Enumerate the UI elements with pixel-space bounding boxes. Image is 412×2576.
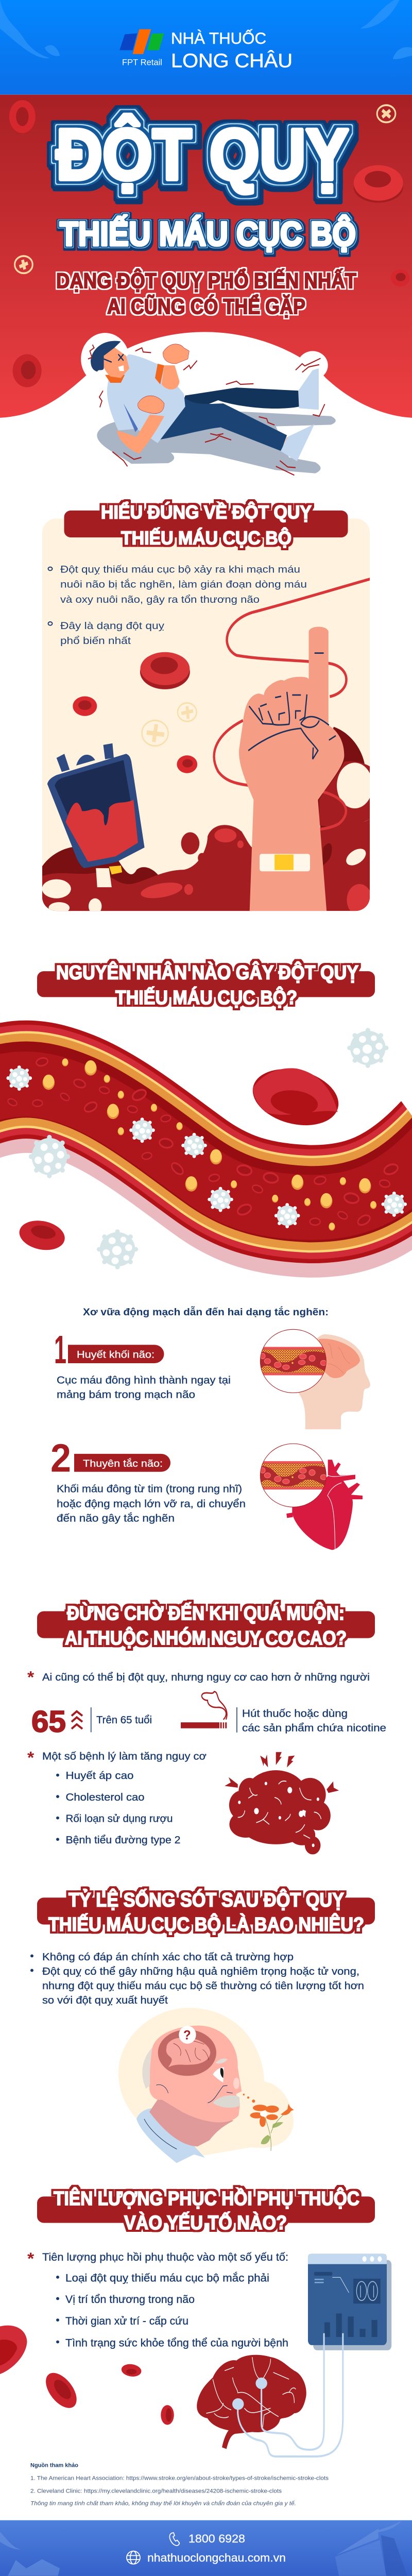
icon: red blood cells (9, 100, 409, 387)
risk list: medical conditions: Rối loạn sử dụng rượu (66, 1813, 173, 1824)
stat: over 65 years: Trên 65 tuổi (96, 1714, 152, 1726)
item 2: cerebral embolism: Thuyên tắc não: (83, 1458, 163, 1469)
intro text: two blockage types: Xơ vữa động mạch dẫn đến hai dạng tắc nghẽn: (83, 1306, 329, 1318)
illustration: red brain with lightning (225, 1752, 339, 1854)
panel: understanding ischemic stroke (42, 518, 372, 916)
heading banner: high risk group (37, 1601, 375, 1649)
list: prognosis factors: Thời gian xử trí - cấp cứu (65, 2314, 188, 2327)
heading banner: high risk group: AI THUỘC NHÓM NGUY CƠ CAO? (65, 1626, 347, 1649)
item 2: cerebral embolism: Khối máu đông từ tim (trong rung nhĩ) (57, 1483, 242, 1495)
icon and text: smoking: Hút thuốc hoặc dùng (242, 1708, 348, 1719)
heading banner: high risk group: ĐỪNG CHỜ ĐẾN KHI QUÁ MUỘN: (67, 1601, 345, 1624)
hero panel: red gradient background with white hump (0, 95, 412, 418)
illustration: man collapsing from stroke (81, 333, 336, 475)
heading banner: causes: THIẾU MÁU CỤC BỘ? (115, 986, 297, 1009)
heading banner: understanding: HIỂU ĐÚNG VỀ ĐỘT QUỴ (101, 501, 312, 522)
heading banner: prognosis: TIÊN LƯỢNG PHỤC HỒI PHỤ THUỘC (54, 2187, 359, 2210)
flower (243, 2094, 294, 2151)
logo: FPT Retail: FPT Retail (122, 58, 162, 67)
bullets: definition text: và oxy nuôi não, gây ra tổn thương não (60, 594, 260, 605)
references: Nguồn tham khảo (30, 2462, 78, 2468)
illustration: artery with plaque and cells (0, 1028, 412, 1269)
tagline: AI CŨNG CÓ THỂ GẶP (107, 294, 305, 318)
header: blue brand bar (0, 0, 412, 95)
footer: contact bar (0, 2520, 412, 2576)
item 1: cerebral thrombosis: 1 (54, 1327, 66, 1372)
references (30, 2462, 329, 2507)
brand name: Nhà thuốc Long Châu (171, 28, 293, 72)
references: 1. The American Heart Association: https://www.stroke.org/en/about-stroke/types-of-stroke/ischemic-stroke-clots (30, 2476, 329, 2481)
risk intro line: * (27, 1668, 34, 1687)
bullets: survival text (30, 1951, 364, 2006)
item 2: cerebral embolism: hoặc động mạch lớn vỡ ra, di chuyển (57, 1498, 246, 1510)
decoration: storefront (0, 2520, 407, 2576)
brain (197, 2355, 306, 2449)
wires (238, 2333, 343, 2456)
heading banner: understanding: THIẾU MÁU CỤC BỘ (121, 527, 291, 549)
illustration: elderly man smelling flower (118, 2008, 294, 2163)
risk list: medical conditions: Cholesterol cao (66, 1791, 145, 1803)
subtitle: Thiếu máu cục bộ: THIẾU MÁU CỤC BỘ (60, 215, 356, 253)
logo: FPT Retail (119, 29, 164, 67)
heading banner: causes (37, 961, 375, 1009)
bandage (260, 854, 310, 871)
heading banner: understanding (64, 501, 348, 549)
title: Đột quỵ: ĐỘT QUỴ (56, 114, 349, 195)
monitor (308, 2254, 391, 2350)
stat: over 65 years: 65 (31, 1705, 66, 1738)
brand name: Nhà thuốc Long Châu: NHÀ THUỐC (171, 28, 266, 47)
list: prognosis factors: * (27, 2249, 34, 2268)
hand (239, 626, 344, 911)
heading banner: prognosis (37, 2187, 375, 2234)
risk intro line (27, 1668, 370, 1687)
squiggles: shaking marks (88, 345, 325, 475)
white blood cells in vessel (6, 1065, 407, 1228)
risk list: medical conditions: * (27, 1749, 34, 1767)
stat: over 65 years (31, 1705, 152, 1738)
item 2: cerebral embolism: đến não gây tắc nghẽn (57, 1513, 175, 1524)
bullets: survival text: so với đột quỵ xuất huyết (42, 1995, 168, 2006)
risk list: medical conditions: Huyết áp cao (66, 1770, 134, 1782)
list: prognosis factors (27, 2249, 288, 2349)
risk list: medical conditions: Một số bệnh lý làm tăng nguy cơ (42, 1751, 207, 1762)
plus badges (142, 703, 197, 746)
risk list: medical conditions: Bệnh tiểu đường type 2 (66, 1834, 180, 1846)
item 1: cerebral thrombosis: mảng bám trong mạch não (57, 1389, 195, 1401)
item 1: cerebral thrombosis: Cục máu đông hình thành ngay tại (57, 1375, 231, 1386)
item 1: cerebral thrombosis: Huyết khối não: (77, 1349, 154, 1360)
bullets: definition text: phổ biến nhất (60, 635, 131, 647)
list: prognosis factors: Loại đột quỵ thiếu máu cục bộ mắc phải (65, 2272, 269, 2284)
item 2: cerebral embolism (50, 1436, 246, 1524)
illustration: head, brain and blocked vessel (259, 1329, 370, 1429)
references: 2. Cleveland Clinic: https://my.clevelandclinic.org/health/diseases/24208-ischemic-stroke-clots (30, 2488, 282, 2495)
illustration: elderly man smelling flower: ? (183, 2028, 191, 2043)
bullets: definition text: nuôi não bị tắc nghẽn, làm gián đoạn dòng máu (60, 579, 307, 590)
bullets: survival text: Đột quỵ có thể gây những hậu quả nghiêm trọng hoặc tử vong, (42, 1965, 359, 1977)
risk list: medical conditions (27, 1749, 207, 1846)
floating cells outside vessel (18, 1028, 388, 1269)
bullets: definition text: Đột quỵ thiếu máu cục bộ xảy ra khi mạch máu (60, 564, 300, 575)
illustration: blood bag, hand and tube (42, 579, 372, 916)
heading banner: prognosis: VÀO YẾU TỐ NÀO? (124, 2211, 287, 2234)
item 1: cerebral thrombosis (54, 1327, 231, 1401)
heading banner: survival rate: THIẾU MÁU CỤC BỘ LÀ BAO NHIÊU? (48, 1913, 364, 1936)
icon and text: smoking (181, 1691, 386, 1734)
red blood cells (73, 652, 197, 773)
tube (214, 579, 370, 854)
blood bag (47, 743, 145, 874)
red cell rings (7, 1057, 399, 1227)
brand name: Nhà thuốc Long Châu: LONG CHÂU (171, 50, 293, 72)
list: prognosis factors: Tiên lượng phục hồi phụ thuộc vào một số yếu tố: (42, 2250, 288, 2263)
icon: phone (169, 2533, 179, 2546)
website: nhathuoclongchau.com.vn (147, 2551, 286, 2564)
item 2: cerebral embolism: 2 (50, 1436, 71, 1480)
icon and text: smoking: các sản phẩm chứa nicotine (242, 1722, 386, 1734)
illustration: heart and blocked vessel (259, 1444, 363, 1550)
bullets: definition text: Đây là dạng đột quỵ (60, 620, 164, 632)
heading banner: causes: NGUYÊN NHÂN NÀO GÂY ĐỘT QUỴ (56, 961, 358, 984)
fat globules (43, 1058, 376, 1231)
heading banner: survival rate (37, 1888, 375, 1936)
icon: plus badges (15, 105, 396, 273)
red blood cells (0, 2326, 174, 2425)
bullets: survival text: Không có đáp án chính xác cho tất cả trường hợp (42, 1951, 294, 1963)
risk intro line: Ai cũng có thể bị đột quỵ, nhưng nguy cơ cao hơn ở những người (42, 1671, 370, 1683)
tagline (56, 267, 356, 318)
illustration: brain, monitor and red cells (0, 2254, 391, 2456)
heading banner: survival rate: TỶ LỆ SỐNG SÓT SAU ĐỘT QUỴ (68, 1888, 344, 1911)
bullets: definition text (48, 564, 307, 647)
bullets: survival text: nhưng đột quỵ thiếu máu cục bộ sẽ thường có tiên lượng tốt hơn (42, 1980, 364, 1992)
phone number: 1800 6928 (188, 2533, 245, 2545)
references: Thông tin mang tính chất tham khảo, không thay thế lời khuyên và chẩn đoán của chuyên gia y tế. (30, 2501, 296, 2507)
icon: globe (127, 2551, 140, 2564)
list: prognosis factors: Vị trí tổn thương trong não (65, 2293, 195, 2306)
list: prognosis factors: Tình trạng sức khỏe tổng thể của người bệnh (65, 2336, 288, 2349)
tagline: DẠNG ĐỘT QUỴ PHỔ BIẾN NHẤT (56, 267, 356, 293)
